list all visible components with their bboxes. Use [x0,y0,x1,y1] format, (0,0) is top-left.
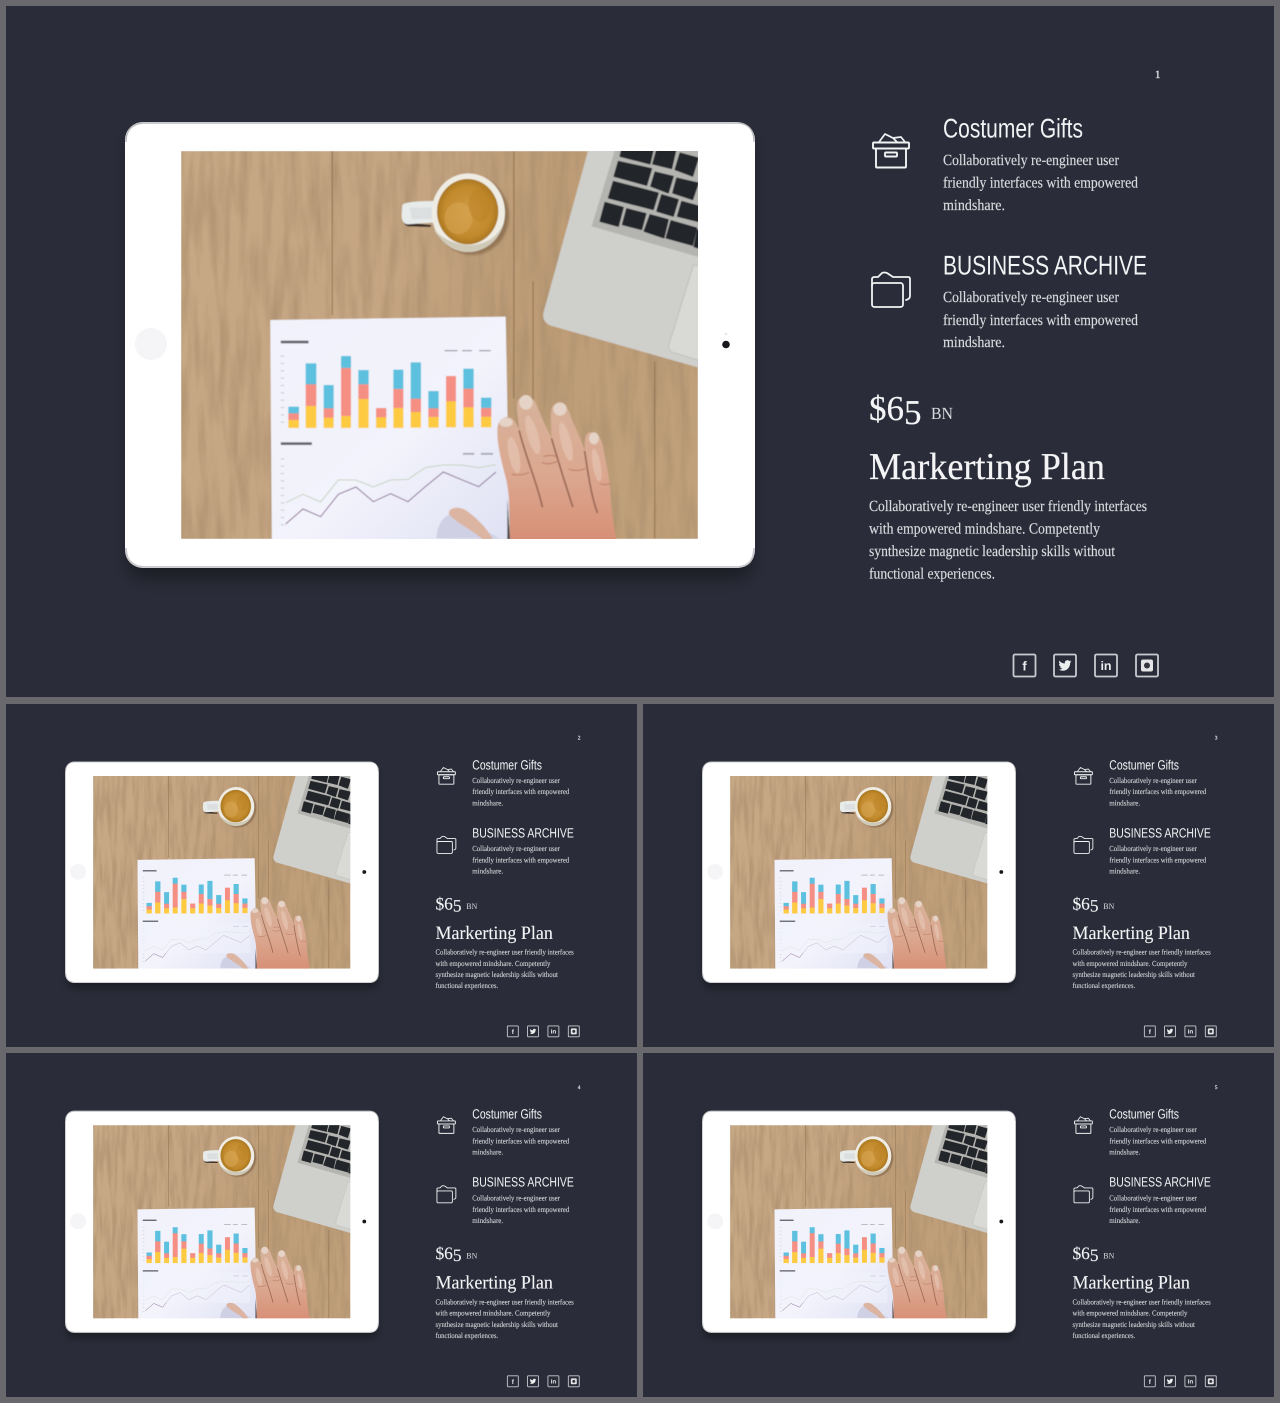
feature: Business Archive: mindshare. [472,867,503,875]
tablet mockup [65,762,379,989]
stat: $65 BN: BN [1103,902,1114,911]
paragraph [869,498,1147,582]
slide 3 [643,704,1274,1047]
slide 4 [6,1053,637,1397]
camera [362,1216,366,1223]
feature: Costumer Gifts: Costumer Gifts [472,1107,542,1121]
tablet mockup [702,762,1016,989]
paragraph: functional experiences. [435,982,498,990]
paragraph: Collaboratively re-engineer user friendly interfaces [869,498,1147,515]
social icons [1014,654,1158,676]
icon: folder [872,272,910,307]
photo: desk with coffee, laptop, charts and hand [93,1125,351,1320]
icon: folder [1074,836,1093,853]
feature: Costumer Gifts: Collaboratively re-engineer user [943,152,1120,169]
icon: gift box [873,134,909,168]
stat: $65 BN [435,1244,477,1265]
social icons [507,1026,579,1037]
feature: Costumer Gifts: Collaboratively re-engineer user [1109,1126,1197,1134]
feature: Business Archive [1109,825,1211,875]
feature: Costumer Gifts [472,757,569,807]
stat: $65 BN: 5 [1090,1246,1099,1265]
feature: Business Archive: Collaboratively re-engineer user [472,1194,560,1202]
stat: $65 BN: 5 [453,1246,462,1265]
stat: $65 BN: BN [1103,1251,1114,1261]
feature: Business Archive [1109,1175,1211,1225]
feature: Business Archive: Collaboratively re-engineer user [1109,844,1197,853]
feature: Costumer Gifts: Collaboratively re-engineer user [1109,776,1197,785]
stat: $65 BN: $6 [435,1244,453,1263]
feature: Costumer Gifts: friendly interfaces with empowered [472,1137,569,1145]
feature: Business Archive: mindshare. [1109,1216,1140,1225]
stat: $65 BN: BN [466,1251,477,1261]
stat: $65 BN: BN [931,404,953,423]
paragraph: Collaboratively re-engineer user friendly interfaces [435,1298,574,1306]
icon: folder [1074,1186,1093,1203]
feature: Costumer Gifts: friendly interfaces with empowered [472,788,569,796]
feature: Business Archive: BUSINESS ARCHIVE [1109,825,1211,840]
stat: $65 BN: $6 [435,894,453,913]
feature: Business Archive: friendly interfaces with empowered [472,1205,569,1214]
feature: Costumer Gifts: Costumer Gifts [472,757,542,772]
feature: Business Archive [943,250,1147,351]
paragraph: functional experiences. [1072,1332,1135,1340]
slide 1: large slide [6,6,1274,697]
paragraph: synthesize magnetic leadership skills without [1072,971,1195,979]
feature: Costumer Gifts [1109,1107,1206,1157]
paragraph: with empowered mindshare. Competently [435,1309,551,1318]
icon: folder [437,1186,456,1203]
feature: Business Archive: friendly interfaces with empowered [1109,1205,1206,1214]
paragraph [1072,1298,1211,1340]
feature: Costumer Gifts: mindshare. [472,799,503,807]
page number: 2 [578,735,581,741]
feature: Costumer Gifts: friendly interfaces with empowered [1109,1137,1206,1145]
social icons: in [551,1028,556,1035]
social icons: f [512,1028,514,1035]
paragraph: functional experiences. [1072,982,1135,990]
feature: Costumer Gifts: Collaboratively re-engineer user [472,776,560,785]
stat: $65 BN [1072,1244,1114,1265]
tablet mockup [125,122,755,580]
home button [707,864,723,880]
feature: Business Archive: Collaboratively re-engineer user [472,844,560,853]
paragraph: Collaboratively re-engineer user friendly interfaces [435,948,574,957]
stat: $65 BN [1072,894,1114,915]
icon: gift box [437,768,455,784]
slide 5 [643,1053,1274,1397]
feature: Costumer Gifts: Costumer Gifts [1109,757,1179,772]
social icons: f [1149,1378,1151,1385]
stat: $65 BN: 5 [904,393,922,432]
home button [135,328,167,360]
feature: Business Archive: BUSINESS ARCHIVE [943,250,1147,280]
social icons: f [1022,658,1027,674]
feature: Business Archive [472,825,574,875]
paragraph: synthesize magnetic leadership skills without [435,971,558,979]
paragraph: with empowered mindshare. Competently [1072,1309,1188,1318]
social icons [1144,1376,1216,1387]
feature: Business Archive [472,1175,574,1225]
paragraph [435,1298,574,1340]
slide 2 [6,704,637,1047]
social icons [1144,1026,1216,1037]
paragraph: synthesize magnetic leadership skills without [435,1320,558,1329]
paragraph: with empowered mindshare. Competently [1072,959,1188,968]
feature: Business Archive: BUSINESS ARCHIVE [1109,1175,1211,1190]
feature: Costumer Gifts [472,1107,569,1157]
photo: desk with coffee, laptop, charts and hand [93,775,351,970]
page number: 4 [578,1084,581,1090]
feature: Business Archive: friendly interfaces with empowered [943,312,1138,329]
feature: Costumer Gifts: Costumer Gifts [1109,1107,1179,1121]
icon: folder [437,836,456,853]
paragraph [1072,948,1211,990]
stat: $65 BN: 5 [453,896,462,915]
social icons [507,1376,579,1387]
paragraph: synthesize magnetic leadership skills without [1072,1320,1195,1329]
home button [70,1213,86,1229]
paragraph: with empowered mindshare. Competently [869,520,1100,538]
home button [70,864,86,880]
home button [707,1213,723,1229]
feature: Business Archive: mindshare. [472,1216,503,1225]
tablet mockup [702,1111,1016,1339]
stat: $65 BN: BN [466,902,477,911]
paragraph: Collaboratively re-engineer user friendly interfaces [1072,948,1211,957]
page number: 5 [1215,1084,1218,1090]
feature: Business Archive: mindshare. [1109,867,1140,875]
feature: Business Archive: Collaboratively re-engineer user [1109,1194,1197,1202]
icon: gift box [1074,1117,1092,1133]
feature: Costumer Gifts: Collaboratively re-engineer user [472,1126,560,1134]
stat: $65 BN [869,389,953,432]
icon: gift box [1074,768,1092,784]
paragraph: functional experiences. [435,1332,498,1340]
stat: $65 BN [435,894,477,915]
feature: Costumer Gifts: friendly interfaces with empowered [1109,788,1206,796]
camera [722,333,730,348]
feature: Business Archive: friendly interfaces with empowered [1109,856,1206,864]
camera [999,1216,1003,1223]
camera [999,866,1003,874]
paragraph: functional experiences. [869,566,995,582]
feature: Business Archive: friendly interfaces with empowered [472,856,569,864]
paragraph: Collaboratively re-engineer user friendly interfaces [1072,1298,1211,1306]
feature: Business Archive: BUSINESS ARCHIVE [472,825,574,840]
stat: $65 BN: 5 [1090,896,1099,915]
social icons: f [1149,1028,1151,1035]
social icons: f [512,1378,514,1385]
feature: Costumer Gifts [943,114,1138,214]
social icons: in [551,1378,556,1385]
photo: desk with coffee, laptop, charts and hand [730,775,988,970]
stat: $65 BN: $6 [1072,1244,1090,1263]
heading: Markerting Plan: Markerting Plan [1072,922,1190,943]
icon: gift box [437,1117,455,1133]
feature: Costumer Gifts: friendly interfaces with empowered [943,174,1138,192]
paragraph: synthesize magnetic leadership skills without [869,543,1116,560]
feature: Business Archive: BUSINESS ARCHIVE [472,1175,574,1190]
feature: Business Archive: Collaboratively re-engineer user [943,289,1120,306]
feature: Costumer Gifts: mindshare. [1109,1148,1140,1157]
social icons: in [1188,1028,1193,1035]
feature: Costumer Gifts: Costumer Gifts [943,114,1083,144]
heading: Markerting Plan: Markerting Plan [1072,1272,1190,1293]
tablet mockup [65,1111,379,1339]
feature: Business Archive: mindshare. [943,334,1005,351]
photo: desk with coffee, laptop, charts and hand [730,1125,988,1320]
stat: $65 BN: $6 [1072,894,1090,913]
feature: Costumer Gifts [1109,757,1206,807]
feature: Costumer Gifts: mindshare. [472,1148,503,1157]
page number: 1 [1155,69,1160,81]
page number: 3 [1215,735,1218,741]
heading: Markerting Plan: Markerting Plan [435,1272,553,1293]
feature: Costumer Gifts: mindshare. [943,197,1005,214]
social icons: in [1188,1378,1193,1385]
paragraph [435,948,574,990]
feature: Costumer Gifts: mindshare. [1109,799,1140,807]
heading: Markerting Plan: Markerting Plan [435,922,553,943]
social icons: in [1100,659,1112,673]
paragraph: with empowered mindshare. Competently [435,959,551,968]
camera [362,866,366,874]
heading: Markerting Plan: Markerting Plan [869,446,1105,488]
stat: $65 BN: $6 [869,389,904,428]
photo: desk with coffee, laptop, charts and hand [181,150,700,542]
